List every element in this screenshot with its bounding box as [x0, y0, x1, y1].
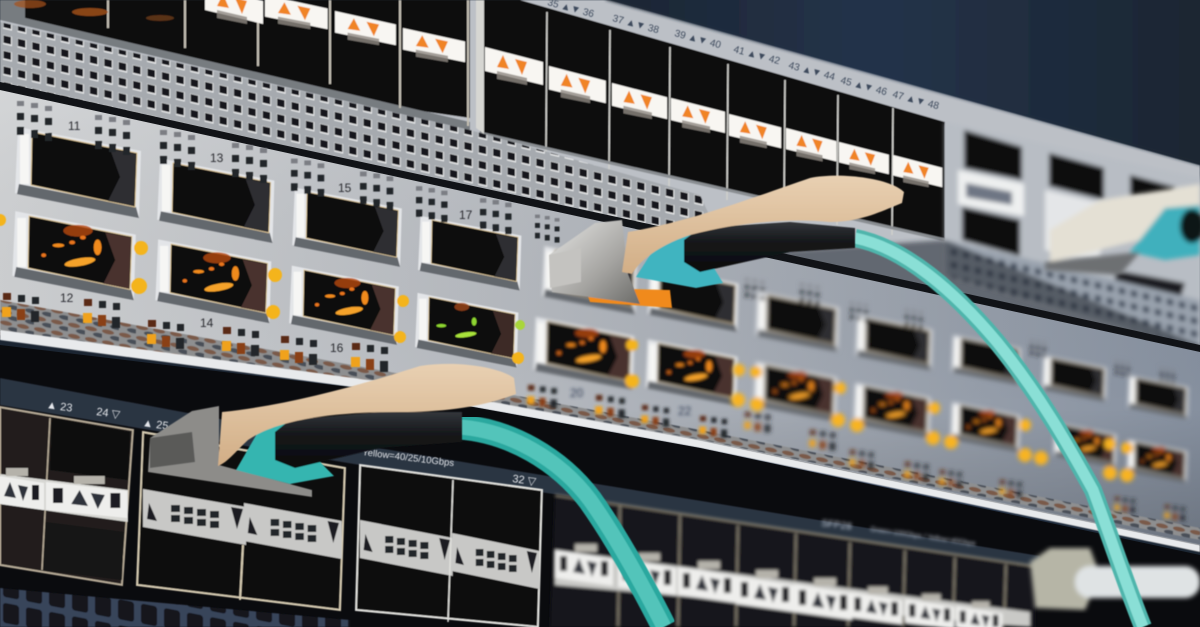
orange reflection: [585, 288, 672, 308]
dark label strip: [0, 378, 1040, 575]
middle switch faceplate: [0, 82, 1200, 552]
teal cable, right: [855, 238, 1143, 627]
SFP28 label: SFP28: [821, 518, 853, 533]
soft blurred top edge of chassis: [606, 0, 1200, 165]
port numbers 20 and 22: 22: [678, 404, 692, 418]
strip labels: [46, 399, 537, 488]
port numbers: 14: [200, 316, 214, 330]
beige pull tab: [218, 364, 516, 466]
bottom vent grill: [0, 588, 350, 627]
port group 12-18: [12, 211, 518, 368]
teal boot: [636, 230, 723, 288]
strip labels: ▲ 25: [142, 417, 169, 433]
upper-left port block: [0, 0, 470, 130]
metal housing: [148, 406, 312, 497]
fibre connector, centre: [549, 176, 904, 308]
port numbers: 13: [210, 151, 224, 165]
strip labels: ▲ 23: [46, 399, 73, 415]
upper-right port block: [480, 0, 945, 240]
white connector and cable, bottom right: [1030, 548, 1200, 610]
strip labels: 32 ▽: [512, 473, 537, 488]
port numbers: 15: [338, 181, 352, 195]
port numbers: 12: [60, 291, 74, 305]
vent clusters below ports: [2, 293, 388, 372]
port numbers 20 and 22: [570, 386, 692, 418]
upper chassis port labels: 47 ▲▼ 48: [891, 89, 940, 112]
beige pull tab: [622, 176, 904, 274]
upper switch chassis: [0, 0, 1200, 350]
port numbers: 11: [68, 119, 81, 133]
port numbers: [60, 119, 473, 355]
perforated vent band: [0, 22, 730, 260]
port block 32: [356, 465, 542, 627]
black cable: [684, 222, 855, 272]
port numbers: 17: [459, 208, 473, 222]
port numbers: 16: [330, 341, 344, 355]
right fibre connector: [1045, 184, 1200, 275]
blue vent clusters: [745, 278, 1175, 384]
port row, in focus: [0, 101, 560, 372]
port numbers 20 and 22: 20: [570, 386, 584, 400]
port block 23-24: [0, 407, 133, 585]
port group 11-17: [15, 127, 521, 291]
upper chassis port labels: 39 ▲▼ 40: [673, 28, 722, 51]
vent clusters above ports: [17, 101, 560, 243]
SFP28 label: [821, 518, 976, 548]
black cable: [275, 412, 462, 468]
upper chassis port labels: [546, 0, 940, 112]
upper chassis port labels: 41 ▲▼ 42: [732, 44, 781, 67]
lower switch: [0, 345, 1200, 627]
upper chassis port labels: 45 ▲▼ 46: [839, 75, 888, 98]
strip labels: Yellow=40/25/10Gbps: [362, 447, 455, 469]
status LEDs: [0, 214, 525, 364]
port block 25: [137, 432, 345, 610]
lower lens-perforated lip: [0, 300, 1200, 540]
fibre connector, lower left: [148, 364, 516, 497]
SFP28 label: Green=100Gbps / Yellow=40Gbps: [870, 526, 976, 548]
upper chassis port labels: 37 ▲▼ 38: [611, 13, 660, 36]
continuous tab strip: [555, 550, 1030, 627]
upper right ports, out of focus: [700, 122, 1200, 352]
port block 33 onward: [550, 495, 1035, 627]
port row, blurred right side: [731, 278, 1188, 521]
upper chassis port labels: 43 ▲▼ 44: [787, 60, 836, 83]
strip labels: 24 ▽: [96, 406, 121, 421]
metal housing: [549, 220, 640, 304]
teal boot: [236, 420, 334, 484]
amber LEDs: [731, 364, 1134, 482]
teal cable, front: [458, 427, 664, 627]
port row, mid focus: [527, 246, 738, 438]
